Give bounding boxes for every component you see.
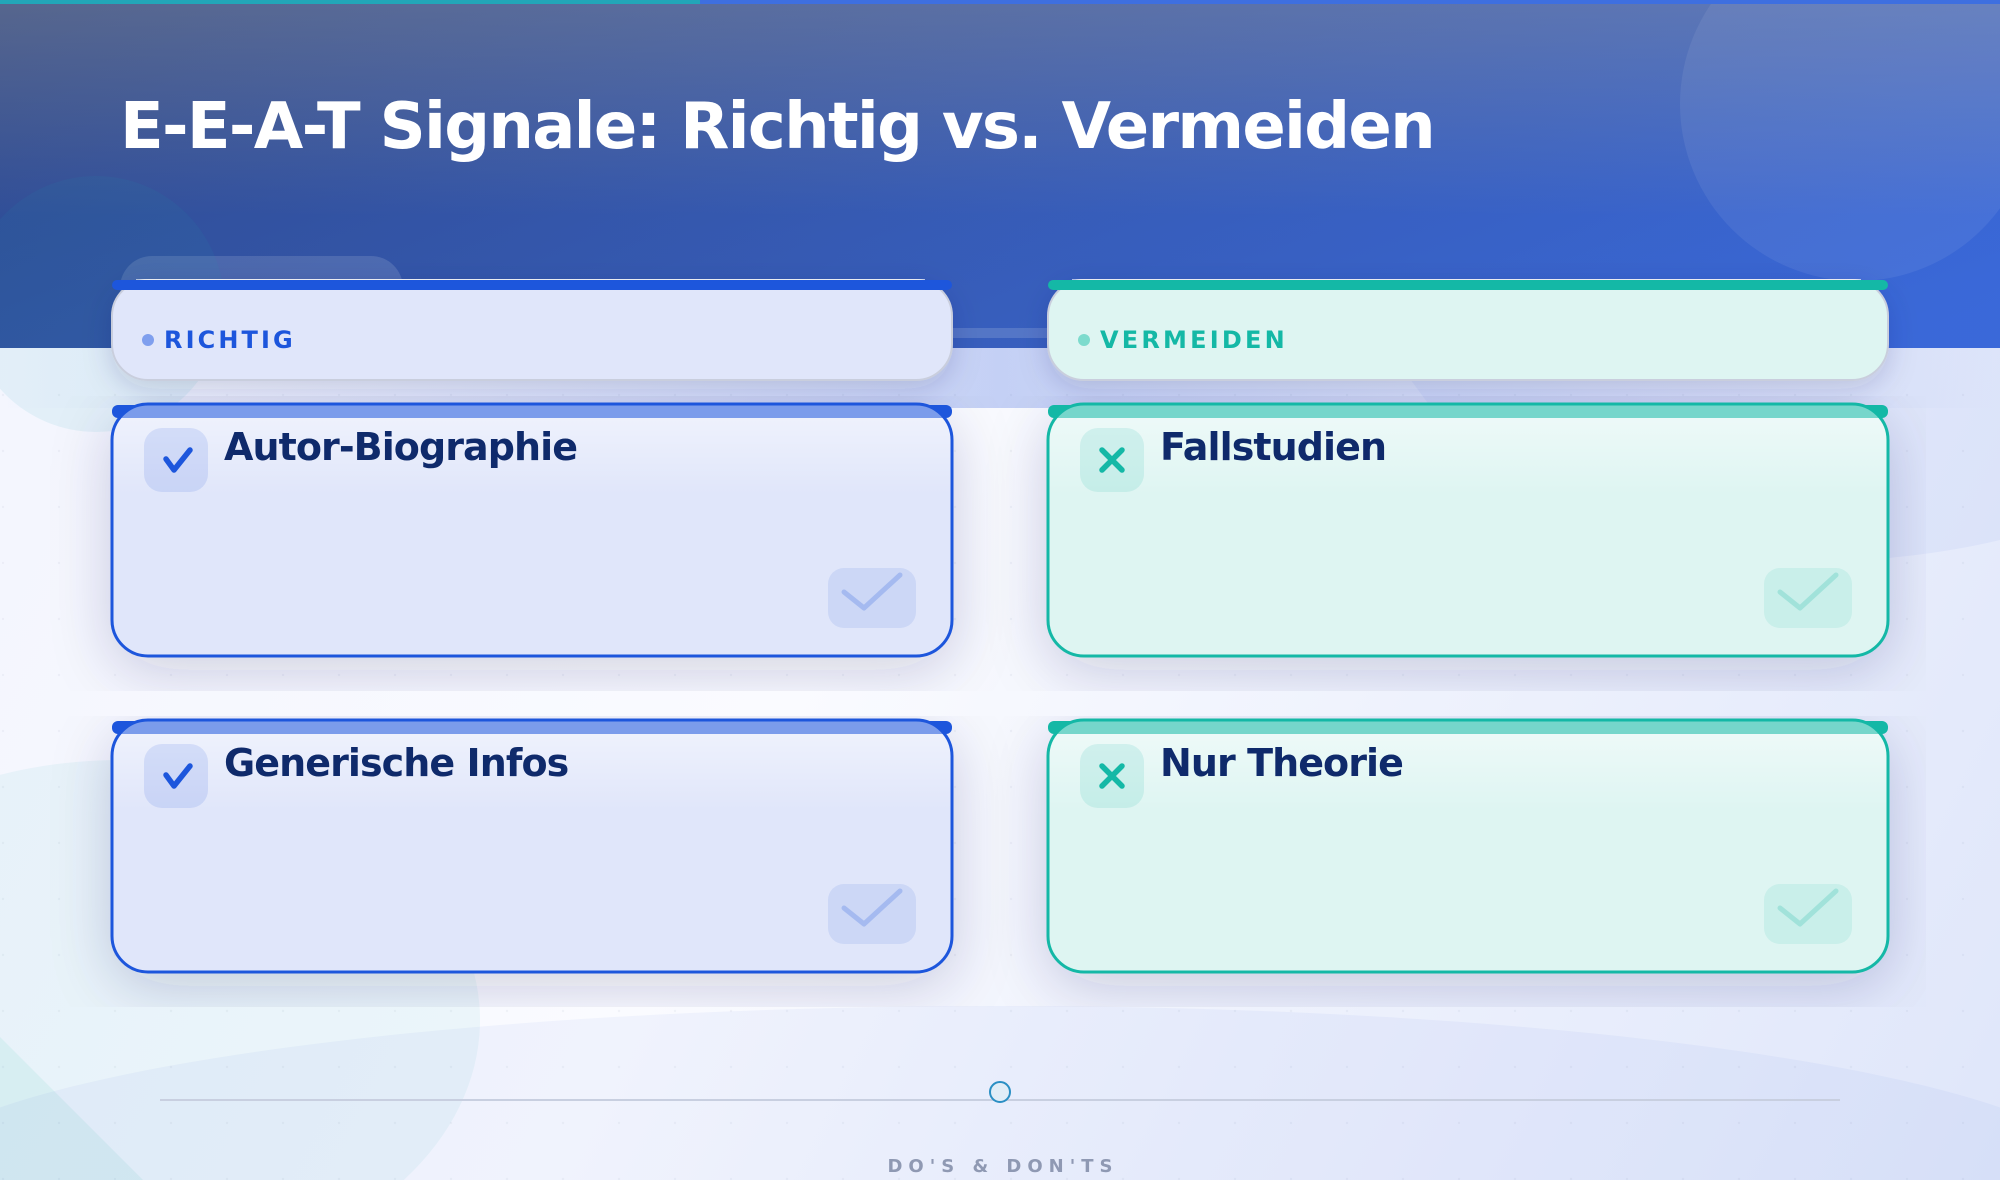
watermark check	[1764, 568, 1852, 628]
icon: cross	[1080, 744, 1144, 808]
header banner	[0, 0, 2000, 348]
card: Autor-Biographie	[112, 404, 952, 656]
title: E-E-A-T Signale: Richtig vs. Vermeiden	[120, 90, 1434, 164]
watermark check	[828, 568, 916, 628]
icon: check	[144, 744, 208, 808]
card title: Nur Theorie	[1160, 741, 1403, 785]
card title: Generische Infos	[224, 741, 568, 785]
watermark check	[828, 884, 916, 944]
card: Generische Infos	[112, 720, 952, 972]
top progress bar	[0, 0, 2000, 4]
column header: Vermeiden	[1048, 279, 1888, 380]
label: Vermeiden: VERMEIDEN	[1100, 326, 1288, 354]
label dot	[142, 334, 154, 346]
decorative teal circle	[0, 176, 224, 432]
footer divider	[160, 1082, 1840, 1102]
label: Richtig: RICHTIG	[164, 326, 296, 354]
label dot	[1078, 334, 1090, 346]
card: Fallstudien	[1048, 404, 1888, 656]
column header: Richtig	[112, 279, 952, 380]
card: Nur Theorie	[1048, 720, 1888, 972]
icon: cross	[1080, 428, 1144, 492]
icon: check	[144, 428, 208, 492]
card title: Autor-Biographie	[224, 425, 577, 469]
footer label: DO'S & DON'TS	[887, 1156, 1119, 1177]
watermark check	[1764, 884, 1852, 944]
card title: Fallstudien	[1160, 425, 1386, 469]
